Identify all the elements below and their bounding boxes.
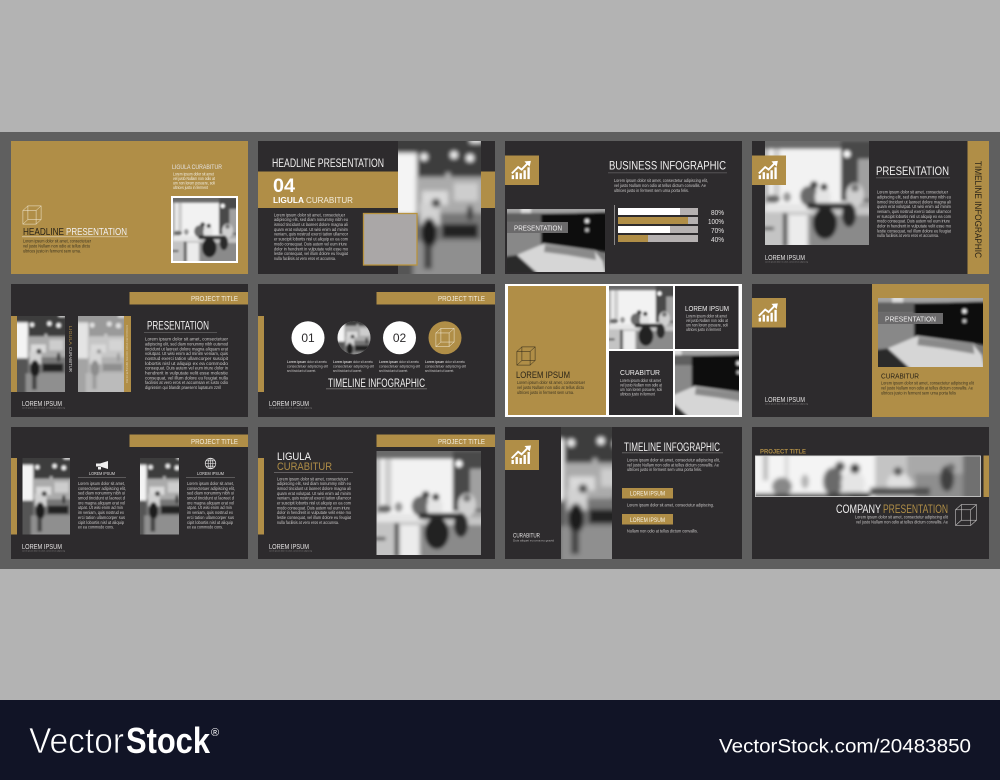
captions: four columns: sed tincidunt ut laoreet. (333, 369, 362, 373)
icon: cube outline (956, 505, 976, 525)
text block: body: consequat, vel illum dolore eu feugiat nulla (145, 375, 229, 380)
text block: body: modo consequat. Duis autem vel eum iriure (274, 241, 348, 246)
text block: right column: consectetuer adipiscing elit, (187, 486, 235, 491)
text block: body: Lorem ipsum dolor sit amet, consectetuer (277, 476, 349, 481)
heading: ligula curabitur: LIGULA (277, 451, 312, 463)
text block: body: lestie consequat, vel illum dolore eu feugiat (274, 251, 349, 256)
text block: ligula curabitur: ultrices justo in ferment (173, 185, 209, 190)
dark tile: curabitur: ultrices justo in ferment (620, 392, 656, 396)
icon: megaphone (96, 461, 108, 470)
project title bar: PROJECT TITLE (438, 296, 485, 303)
dark tile: curabitur: Lorem ipsum dolor sit amet (620, 378, 662, 383)
gold tile: vel justo Nullam non odio at tellus dictu (517, 385, 585, 390)
label: curabitur: CURABITUR (513, 532, 540, 540)
text block: body: adipiscing elit, sed diam nonummy nibh eu (274, 217, 349, 222)
footer label: lorem ipsum: LOREM IPSUM (22, 544, 62, 551)
bar chart: percentages: 70% (711, 228, 724, 235)
reference number: VectorStock.com/20483850 (719, 736, 971, 758)
photo: blurred interior (390, 133, 490, 281)
gold button 1 with caption: LOREM IPSUM (630, 491, 665, 498)
captions: four columns: sed tincidunt ut laoreet. (287, 369, 316, 373)
logo: VectorStock: ® (211, 727, 219, 739)
icon: cube in gold circle (428, 321, 462, 354)
text block: right column: utpat. Ut wisi enim ad min (187, 505, 233, 510)
text block: intro: ultrices justo in ferment sem urna porta felis. (627, 467, 702, 472)
heading: company presentation: PRESENTATION (883, 504, 948, 516)
column heading left (78, 471, 126, 478)
photo: counter with label: PRESENTATION (514, 226, 562, 232)
heading: company presentation (836, 504, 948, 516)
footer label: lorem ipsum: Lorem ipsum dolor sit amet, consectetur adipiscing (765, 402, 808, 406)
text block: ligula curabitur: Lorem ipsum dolor sit amet (173, 172, 215, 176)
captions: four columns: Lorem ipsum dolor sit ametu (333, 360, 373, 364)
text block: curabitur (881, 372, 975, 396)
text block: body: Lorem ipsum dolor sit amet, consectetuer (145, 337, 229, 342)
panel: slide 11 timeline infographic (505, 419, 742, 566)
heading: timeline infographic: TIMELINE INFOGRAPHIC (624, 442, 720, 454)
project title bar: PROJECT TITLE (438, 439, 485, 446)
gold band with number: 04 (273, 176, 295, 197)
text block: right column: erci tation ullamcorper sus (187, 515, 234, 520)
panel: slide 6 timeline circles (258, 284, 495, 417)
text block: body: nulla facilisis at vero eros et accumsa. (277, 520, 339, 525)
panel: slide 3 business infographic (501, 141, 742, 279)
panel: slide 4 presentation (752, 133, 989, 274)
text block: body: ismod tincidunt ut laoreet dolore magna ali (274, 222, 348, 227)
text block: body: vel justo Nullam non odio at tellus dictum convallis. Ae (856, 520, 949, 524)
text block: headline body (23, 238, 92, 254)
text block: intro: ultrices justo in ferment sem urna porta felis. (614, 188, 689, 193)
footer label: lorem ipsum: Lorem ipsum dolor sit amet, consectetur adipiscing (765, 260, 808, 264)
dark tile: lorem ipsum: vel justo Nullam non odio at (686, 318, 729, 323)
dark tile: curabitur: um non lorem posuere, soli (620, 387, 662, 392)
heading: company presentation: COMPANY (836, 504, 881, 516)
gold strip with vertical title: TIMELINE INFOGRAPHIC (972, 161, 983, 258)
text block: headline body: vel justo Nullam non odio at tellus dictu (23, 244, 91, 248)
project title bar (130, 292, 248, 304)
heading: ligula curabitur (274, 451, 353, 473)
photo: office (757, 133, 877, 253)
text block: body (274, 212, 349, 261)
gold tile: LOREM IPSUM (516, 370, 570, 380)
step circle 02 (383, 321, 416, 354)
text block: intro: Lorem ipsum dolor sit amet, consectetur adipiscing elit, (627, 458, 720, 462)
heading: business infographic: BUSINESS INFOGRAPHIC (609, 160, 726, 172)
photo: interior (12, 311, 70, 397)
gold band with number: CURABITUR (306, 196, 353, 205)
text block: intro: Lorem ipsum dolor sit amet, consectetur adipiscing elit, (614, 178, 708, 183)
dark tile: lorem ipsum: LOREM IPSUM (685, 304, 729, 313)
text block: body: adipiscing elit, sed diam nonummy nibh eu (277, 481, 352, 486)
text block: body: modo consequat. Duis autem vel eum iriure (877, 219, 951, 224)
photo: faded interior: Lorem ipsum dolor sit amet, consectetur adipiscing elit sed diam (126, 325, 128, 383)
captions: four columns: consectetuer adipiscing elit (287, 364, 328, 368)
text block: curabitur: ultrices justo in ferment sem urna porta felis (881, 390, 956, 396)
dark tile: lorem ipsum: um non lorem posuere, soli (686, 322, 728, 328)
heading: presentation: PRESENTATION (147, 320, 209, 332)
text block: body: nostrud exerci tation ullamcorper suscipit (145, 356, 229, 361)
heading: headline presentation: HEADLINE (23, 227, 64, 238)
icon: growth chart (752, 298, 786, 328)
text block: body: veniam, quis nostrud exerci tation ullamcor (274, 232, 349, 237)
icon: growth chart (752, 156, 786, 185)
captions: four columns: consectetuer adipiscing elit (425, 364, 466, 368)
panel: slide 5 presentation with two photos (11, 284, 248, 417)
captions: four columns: sed tincidunt ut laoreet. (425, 369, 454, 373)
dark tile: lorem ipsum: ultrices justo in ferment (686, 327, 722, 332)
text block: ligula curabitur: vel justo Nullam non odio at (173, 176, 216, 181)
panel: slide 9 two columns (11, 427, 248, 559)
text block: curabitur: vel justo Nullam non odio at tellus dictum convallis. Ae (881, 386, 974, 390)
text block: body: dolor in hendrerit in vulputate velit esse mo (274, 246, 349, 251)
text block: body (855, 514, 949, 524)
gold strip with vertical title (968, 141, 989, 274)
text block: left column (78, 481, 126, 530)
heading: headline presentation: HEADLINE PRESENTATION (272, 158, 384, 170)
icon: growth chart (505, 156, 539, 185)
bar chart: percentages (614, 205, 724, 245)
vertical label: CURABITUR (68, 347, 73, 373)
photo: counter tile (651, 345, 763, 422)
captions: four columns: sed tincidunt ut laoreet. (379, 369, 408, 373)
captions: four columns (287, 360, 466, 373)
footer label: lorem ipsum: LOREM IPSUM (765, 397, 805, 404)
panel: slide 1 headline presentation (11, 141, 248, 274)
text block: headline body: ultrices justo in ferment sem urna. (23, 248, 81, 254)
vertical label (68, 326, 73, 373)
text block: right column: Lorem ipsum dolor sit amet, (187, 481, 234, 486)
text block: left column: cipit lobortis nisl ut aliquip (78, 520, 125, 525)
text block: body: adipiscing elit, sed diam nonummy nibh eu (877, 194, 952, 199)
text block: intro: vel justo Nullam non odio at tellus dictum convallis. Ae (627, 462, 720, 467)
captions: four columns: consectetuer adipiscing elit (379, 364, 420, 368)
text block: ligula curabitur: LIGULA CURABITUR (172, 165, 223, 171)
column heading left: LOREM IPSUM (89, 471, 115, 476)
panel: slide 10 ligula curabitur (258, 427, 495, 563)
text block: body: lobortis nisl ut aliquip ex ea commodo (145, 361, 229, 366)
gold button 2 with caption: Nullam non odio at tellus dictum convallis. (627, 528, 698, 534)
text block: body: tincidunt ut laoreet dolore magna aliquam erat (145, 346, 229, 351)
photo: office in white frame (168, 193, 241, 266)
text block: curabitur: Lorem ipsum dolor sit amet, consectetur adipiscing elit (881, 380, 975, 386)
text block: right column: sed diam nonummy nibh ui (187, 491, 234, 496)
footer label: lorem ipsum: Lorem ipsum dolor sit amet, consectetur adipiscing (22, 406, 65, 410)
text block: left column: consectetuer adipiscing elit, (78, 486, 126, 491)
text block: body (145, 337, 229, 390)
step circle 02: 02 (393, 331, 406, 345)
photo: interior left (18, 453, 75, 539)
label: curabitur: Duis aliquet eu urna eu gravid (513, 538, 555, 542)
gold tile: Lorem ipsum dolor sit amet, consectetuer (517, 380, 586, 385)
text block: left column: smod tincidunt ut laoreet d (78, 496, 126, 500)
captions: four columns: Lorem ipsum dolor sit ametu (287, 360, 327, 364)
photo: interior right (131, 453, 189, 539)
dark tile: curabitur (609, 351, 673, 415)
text block: body: er suscipit lobortis nisl ut aliquip ex ea com (274, 237, 348, 242)
project title bar (376, 434, 495, 447)
text block: left column: ore magna aliquam erat vol (78, 500, 125, 505)
logo: VectorStock (29, 720, 219, 761)
text block: right column (187, 481, 235, 530)
captions: four columns: consectetuer adipiscing elit (333, 364, 374, 368)
panel: slide 7 white framed grid (505, 281, 763, 422)
text block: ligula curabitur (172, 165, 223, 190)
text block: body: Lorem ipsum dolor sit amet, consectetuer (274, 212, 346, 217)
project title bar (376, 292, 495, 304)
captions: four columns: Lorem ipsum dolor sit ametu (425, 360, 465, 364)
text block: body: consequat. Duis autem vel eum iriure dolor in (145, 366, 229, 371)
heading: headline presentation (22, 227, 128, 238)
dark tile: curabitur: vel justo Nullam non odio at (620, 382, 663, 388)
translucent gold-framed box (364, 214, 417, 265)
text block: body: Lorem ipsum dolor sit amet, consectetuer (877, 190, 949, 195)
text block: right column: ore magna aliquam erat vol (187, 500, 234, 505)
text block: left column: utpat. Ut wisi enim ad min (78, 505, 124, 510)
footer label: lorem ipsum: LOREM IPSUM (269, 401, 309, 408)
column heading right (186, 471, 235, 478)
text block: ligula curabitur: um non lorem posuere, soli (173, 180, 215, 186)
photo: office tile (604, 281, 678, 354)
text block: body: ismod tincidunt ut laoreet dolore magna ali (877, 199, 951, 204)
gold left accent (11, 458, 17, 534)
footer label: lorem ipsum: LOREM IPSUM (22, 401, 62, 408)
text block: body: facilisis at vero eros et accumsan et iusto odio (145, 380, 229, 385)
heading: presentation: PRESENTATION (876, 166, 949, 178)
text block: body: hendrerit in vulputate velit esse molestie (145, 370, 229, 376)
bar chart: percentages: 80% (711, 210, 724, 217)
text block: body: er suscipit lobortis nisl ut aliquip ex ea com (277, 500, 351, 506)
panel: slide 2 headline 04 (258, 133, 495, 281)
heading: headline presentation: PRESENTATION (66, 227, 127, 238)
text block: body: ismod tincidunt ut laoreet dolore magna ali (277, 486, 351, 491)
text block: right column: cipit lobortis nisl ut aliquip (187, 520, 234, 525)
gold tile: ultrices justo in ferment sem urna. (517, 390, 574, 395)
gold tile (508, 286, 606, 415)
gold button 2 with caption: LOREM IPSUM (630, 517, 665, 524)
panel: slide 12 company presentation (747, 427, 989, 559)
gold band with number: LIGULA (273, 196, 304, 205)
text block: body: nulla facilisis at vero eros et accumsa. (274, 256, 336, 261)
text block: body: veniam, quis nostrud exerci tation ullamcor (877, 209, 952, 214)
logo: VectorStock: Stock (126, 720, 211, 761)
text block: body: lestie consequat, vel illum dolore eu feugiat (277, 515, 352, 520)
photo: faded interior (73, 311, 131, 396)
captions: four columns: Lorem ipsum dolor sit ametu (379, 360, 419, 364)
project title: PROJECT TITLE (760, 448, 806, 456)
project title bar: PROJECT TITLE (191, 439, 238, 446)
text block: body (877, 190, 952, 238)
photo: counter with label (501, 203, 611, 279)
text block: left column: ex ea commodo cons. (78, 525, 114, 530)
footer label: lorem ipsum: Lorem ipsum dolor sit amet, consectetur adipiscing (269, 550, 312, 552)
heading: ligula curabitur: CURABITUR (277, 461, 332, 473)
text block: left column: Lorem ipsum dolor sit amet, (78, 481, 125, 486)
footer label: lorem ipsum: LOREM IPSUM (269, 544, 309, 551)
step circle 01: 01 (301, 331, 315, 345)
text block: left column: erci tation ullamcorper sus (78, 515, 125, 520)
photo strip: blurred people (755, 456, 981, 497)
text block: body: veniam, quis nostrud exerci tation ullamcor (277, 496, 352, 501)
photo circle (338, 321, 370, 354)
text block: body: quam erat volutpat. Ut wisi enim ad minim (877, 204, 951, 209)
photo: counter with label (870, 291, 991, 375)
photo: interior tall (537, 419, 637, 566)
icon: globe (205, 458, 216, 469)
bar chart: percentages: 40% (711, 237, 724, 244)
text block: body: nulla facilisis at vero eros et accumsa. (877, 233, 939, 238)
text block: left column: im veniam, quis nostrud ex (78, 510, 125, 515)
text block: intro: vel justo Nullam non odio at tellus dictum convallis. Ae (614, 183, 707, 188)
gold right accent (984, 456, 989, 497)
text block: body: Lorem ipsum dolor sit amet, consectetur adipiscing elit (855, 514, 949, 520)
text block: body: er suscipit lobortis nisl ut aliquip ex ea com (877, 214, 951, 219)
text block: body: quam erat volutpat. Ut wisi enim ad minim (274, 227, 348, 232)
text block: intro (627, 458, 720, 472)
text block: body: adipiscing elit, sed diam nonummy nibh euismod (145, 341, 229, 346)
gold left accent (258, 458, 264, 534)
heading: timeline infographic: TIMELINE INFOGRAPHIC (328, 378, 425, 390)
text block: body (277, 476, 352, 525)
text block: body: dolor in hendrerit in vulputate velit esse mo (277, 510, 352, 515)
text block: right column: smod tincidunt ut laoreet d (187, 496, 235, 500)
text block: body: volutpat. Ut wisi enim ad minim veniam, quis (145, 351, 228, 356)
logo: VectorStock: Vector (29, 720, 124, 761)
dark tile: curabitur: CURABITUR (620, 368, 661, 377)
text block: body: lestie consequat, vel illum dolore eu feugiat (877, 228, 952, 233)
footer label: lorem ipsum: LOREM IPSUM (765, 255, 805, 262)
dark tile: lorem ipsum: Lorem ipsum dolor sit amet (686, 314, 728, 318)
gold button 1 with caption: Lorem ipsum dolor sit amet, consectetur adipiscing. (627, 502, 714, 508)
photo: counter with label: PRESENTATION (885, 316, 936, 324)
bar chart: percentages: 100% (708, 219, 724, 226)
icon: growth chart (505, 440, 539, 470)
text block: curabitur: CURABITUR (881, 372, 919, 380)
text block: right column: im veniam, quis nostrud ex (187, 510, 234, 515)
column heading right: LOREM IPSUM (197, 471, 224, 476)
footer label: lorem ipsum: Lorem ipsum dolor sit amet, consectetur adipiscing (22, 550, 65, 552)
project title bar (130, 434, 248, 447)
text block: body: modo consequat. Duis autem vel eum iriure (277, 505, 351, 510)
label: curabitur (513, 532, 555, 542)
dark tile: lorem ipsum (675, 286, 738, 349)
gold button 2 with caption (622, 514, 698, 534)
gold left accent (258, 316, 264, 392)
text block: right column: ex ea commodo cons. (187, 525, 223, 530)
text block: body: dolor in hendrerit in vulputate velit esse mo (877, 224, 952, 228)
text block: headline body: Lorem ipsum dolor sit amet, consectetuer (23, 238, 92, 244)
text block: body: quam erat volutpat. Ut wisi enim ad minim (277, 491, 351, 496)
vertical label: LIGULA (68, 326, 73, 346)
watermark bar (0, 700, 1000, 780)
project title bar: PROJECT TITLE (191, 296, 238, 303)
step circle 01 (292, 321, 324, 354)
gold button 1 with caption (622, 488, 714, 508)
icon: cube outline (23, 206, 41, 224)
photo: office large (368, 443, 489, 563)
panel: slide 8 gold column (752, 284, 991, 417)
text block: body: dignissim qui blandit praesent luptatum zzril (145, 385, 221, 390)
text block: left column: sed diam nonummy nibh ui (78, 491, 125, 496)
gold left accent (11, 316, 17, 392)
text block: intro (614, 178, 708, 193)
footer label: lorem ipsum: Lorem ipsum dolor sit amet, consectetur adipiscing (269, 406, 312, 410)
gold band with number (258, 172, 495, 208)
